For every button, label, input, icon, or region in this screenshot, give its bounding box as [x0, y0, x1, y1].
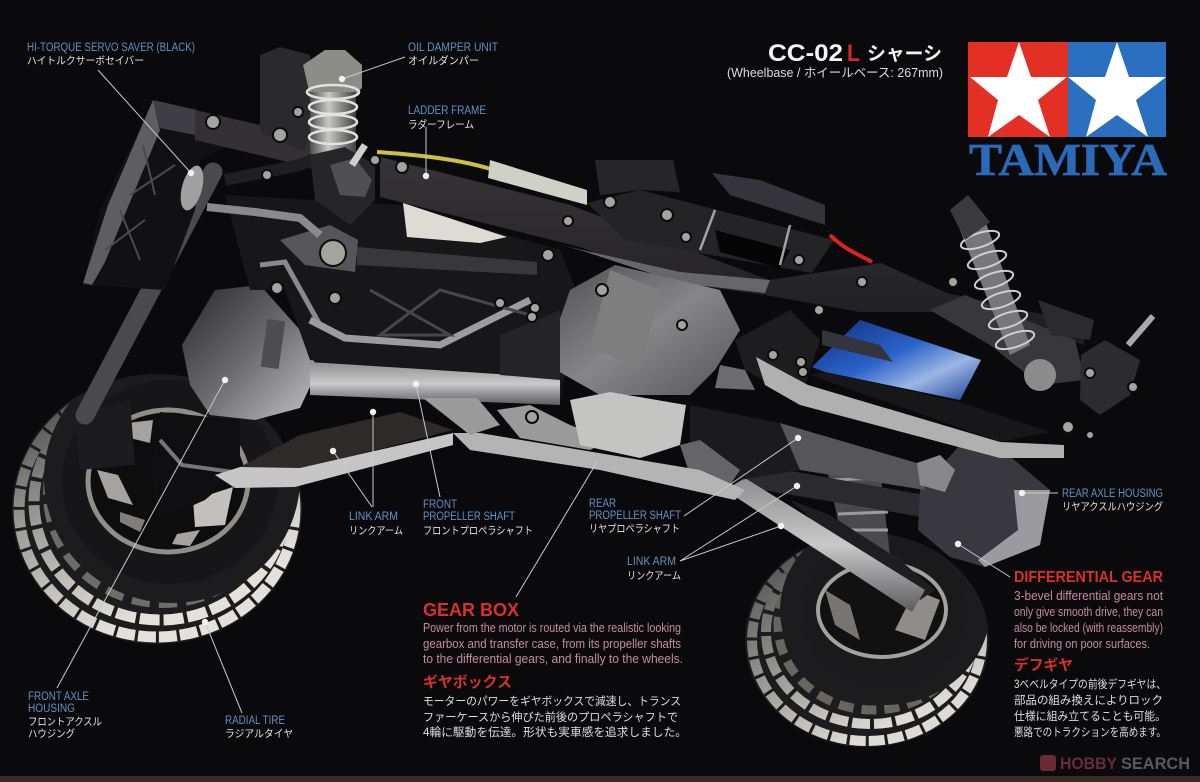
servo strap: [207, 207, 320, 235]
label: front propeller shaft: [423, 499, 533, 537]
label: oil damper unit: [408, 42, 498, 67]
upper ladder frame: [380, 157, 1085, 345]
label: front axle housing: [28, 691, 102, 740]
label: hi-torque servo saver: [27, 42, 195, 67]
rear upright: [1080, 316, 1153, 415]
shock body: [958, 212, 1030, 355]
hobby search watermark: [1040, 754, 1190, 773]
damper cap: [303, 50, 362, 95]
bumper face: [83, 100, 160, 285]
servo saver disc: [176, 163, 208, 213]
rear hidden shock: [825, 460, 890, 555]
tray slot: [715, 230, 790, 268]
tamiya logo: [968, 42, 1167, 185]
lower chassis plate and front link: [215, 412, 745, 500]
label: oil damper unit: OIL DAMPER UNIT: [408, 42, 498, 54]
differential japanese heading: デフギヤ: [1014, 656, 1073, 674]
battery tray boxes: [587, 160, 872, 273]
rear tire: [745, 533, 989, 747]
coil: [959, 227, 1036, 353]
label: rear propeller shaft: [589, 498, 681, 535]
knuckle link: [160, 440, 240, 473]
knuckle: [310, 147, 375, 225]
tamiya mark: [715, 365, 755, 390]
bumper lattice: [105, 145, 175, 260]
gear box japanese text: 4輪に駆動を伝達。形状も実車感を追求しました。: [423, 725, 687, 739]
damper post: [352, 145, 365, 165]
tray frame: [587, 190, 834, 273]
gear box japanese text: [423, 694, 687, 739]
differential japanese text: 悪路でのトラクションを高めます。: [1014, 725, 1166, 739]
yellow wire and connector: [377, 152, 587, 205]
differential english text: only give smooth drive, they can: [1014, 605, 1163, 619]
middle suspension parts: [207, 145, 610, 450]
label: front propeller shaft: PROPELLER SHAFT: [423, 511, 515, 523]
front bumper bracket: [83, 100, 260, 290]
upper tie rod: [357, 247, 537, 275]
rear lattice: [810, 372, 1050, 442]
gear box heading: GEAR BOX: [423, 600, 519, 620]
gear box english text: Power from the motor is routed via the realistic looking: [423, 621, 681, 635]
housing highlight: [978, 490, 1050, 567]
front axle housing: [182, 285, 318, 420]
label: rear axle housing: [1062, 488, 1163, 513]
differential english text: [1014, 589, 1163, 651]
chassis screws: [206, 107, 1138, 439]
hobby search watermark: SEARCH: [1121, 754, 1190, 773]
title: [727, 40, 943, 80]
rail highlight: [560, 245, 770, 293]
steering rod: [85, 172, 213, 415]
lower silver frame rail: [756, 357, 1064, 458]
gear box japanese text: ファーケースから伸びた前後のプロペラシャフトで: [423, 710, 678, 724]
box two: [712, 173, 825, 225]
hobby search watermark: HOBBY: [1060, 754, 1118, 773]
label: oil damper unit: オイルダンパー: [408, 54, 479, 67]
label: hi-torque servo saver: HI-TORQUE SERVO SAVER (BLACK): [27, 42, 195, 54]
bumper body: [83, 100, 260, 290]
rear axle housing: [918, 445, 1050, 567]
label: front propeller shaft: FRONT: [423, 499, 457, 511]
front link silver: [215, 433, 453, 488]
silver bracket: [497, 405, 610, 450]
rear bracket: [930, 295, 1085, 385]
gearbox: [500, 265, 820, 458]
label: front axle housing: FRONT AXLE: [28, 691, 89, 703]
front cross member: [195, 110, 340, 175]
label: rear propeller shaft: PROPELLER SHAFT: [589, 510, 681, 522]
differential gear text block: [1014, 569, 1166, 739]
gear box japanese text: モーターのパワーをギヤボックスで減速し、トランス: [423, 694, 681, 708]
red wire: [830, 235, 872, 262]
gear case band: [590, 270, 660, 370]
gear box text block: [423, 600, 687, 739]
rear sidewall: [802, 538, 968, 686]
front link lattice: [238, 412, 453, 470]
hub and knuckle: [150, 412, 240, 520]
differential japanese text: 3ベベルタイプの前後デフギヤは、: [1014, 677, 1166, 691]
blue battery: [812, 320, 981, 400]
rear tread: [752, 539, 982, 741]
lattice behind lower link: [790, 500, 935, 600]
rear drive shaft: [780, 423, 925, 490]
rear wheel: [745, 533, 989, 747]
motor mount: [735, 310, 820, 400]
differential english text: also be locked (with reassembly): [1014, 621, 1163, 635]
gearbox support: [423, 398, 500, 435]
label: front axle housing: ハウジング: [28, 727, 75, 740]
label: radial tire: [225, 715, 293, 740]
bumper top: [153, 100, 197, 135]
title: L: [847, 40, 860, 67]
title: シャーシ: [867, 44, 942, 65]
vertical bar: [261, 319, 285, 369]
motor barrel: [822, 330, 893, 362]
bright link: [310, 300, 530, 345]
silver steering link: [260, 262, 320, 325]
label: link arm rear: [627, 556, 681, 582]
gear box japanese heading: ギヤボックス: [423, 674, 512, 691]
label: rear axle housing: REAR AXLE HOUSING: [1062, 488, 1163, 500]
central dark chassis: [225, 195, 580, 400]
leader lines: [57, 57, 1058, 713]
label: link arm front: LINK ARM: [349, 511, 398, 523]
frame white reflection: [403, 203, 507, 243]
label: front propeller shaft: フロントプロペラシャフト: [423, 525, 533, 537]
rail: [380, 157, 1085, 345]
steering bracket: [280, 225, 358, 272]
rim: [88, 410, 248, 552]
tray clip: [700, 210, 790, 265]
rear damper: [930, 195, 1094, 391]
label: radial tire: RADIAL TIRE: [225, 715, 285, 727]
bottom paper edge: [0, 776, 1200, 782]
differential english text: 3-bevel differential gears not: [1014, 589, 1163, 603]
front wheel: [12, 374, 302, 644]
differential english text: for driving on poor surfaces.: [1014, 637, 1150, 651]
differential japanese text: [1014, 677, 1166, 739]
label: link arm front: [349, 511, 403, 537]
rear rim: [818, 563, 946, 657]
rear suspension: [680, 405, 1050, 612]
lattice: [370, 290, 530, 335]
rear frame boxes: [1038, 300, 1094, 340]
rear shaft silver: [917, 455, 955, 492]
front lump: [75, 400, 135, 470]
label: rear propeller shaft: リヤプロペラシャフト: [589, 523, 680, 535]
box one: [595, 160, 680, 195]
label: front axle housing: HOUSING: [28, 703, 75, 715]
label: rear axle housing: リヤアクスルハウジング: [1062, 500, 1163, 513]
gear box english text: [423, 621, 683, 666]
differential japanese text: 仕様に組み立てることも可能。: [1014, 709, 1166, 723]
rear shock cap: [950, 195, 990, 240]
upper rear link: [740, 462, 925, 517]
label: ladder frame: LADDER FRAME: [408, 105, 486, 117]
differential heading: DIFFERENTIAL GEAR: [1014, 569, 1163, 586]
differential japanese text: 部品の組み換えによりロック: [1014, 694, 1163, 707]
label: link arm front: リンクアーム: [349, 525, 403, 537]
tire tread: [19, 381, 295, 637]
rear spokes: [895, 590, 940, 640]
gear box english text: to the differential gears, and finally to the wheels.: [423, 652, 683, 666]
spokes: [97, 420, 233, 546]
lower silver case: [570, 392, 686, 458]
label: rear propeller shaft: REAR: [589, 498, 616, 510]
rear shaft dark section: [690, 405, 800, 480]
link bracket: [680, 440, 740, 485]
title: CC-02: [768, 40, 843, 67]
tamiya logo: TAMIYA: [969, 134, 1167, 185]
front tire: [12, 374, 302, 644]
shock eye: [1024, 359, 1056, 391]
watermark icon: [1040, 755, 1056, 771]
label: link arm rear: リンクアーム: [627, 570, 681, 582]
lower rear link silver: [725, 478, 925, 612]
silver lower plate: [453, 433, 745, 500]
steering arm: [225, 145, 345, 180]
damper bracket: [260, 47, 310, 152]
label: front axle housing: フロントアクスル: [28, 716, 102, 728]
label: hi-torque servo saver: ハイトルクサーボセイバー: [27, 55, 144, 67]
bottom frame section: [500, 310, 560, 380]
label: link arm rear: LINK ARM: [627, 556, 676, 568]
front damper: [260, 47, 375, 225]
damper nut: [330, 158, 372, 197]
gear case: [556, 265, 740, 395]
gear box english text: gearbox and transfer case, from its propeller shafts: [423, 637, 681, 651]
hidden coil: [830, 478, 888, 530]
wheelbase: (Wheelbase / ホイールベース: 267mm): [727, 66, 943, 80]
label: radial tire: ラジアルタイヤ: [225, 728, 293, 740]
sidewall: [62, 380, 278, 584]
spring rings: [307, 85, 359, 144]
damper spring: [310, 92, 356, 154]
front prop shaft: [310, 362, 560, 405]
label: ladder frame: [408, 105, 486, 131]
label: ladder frame: ラダーフレーム: [408, 118, 474, 131]
